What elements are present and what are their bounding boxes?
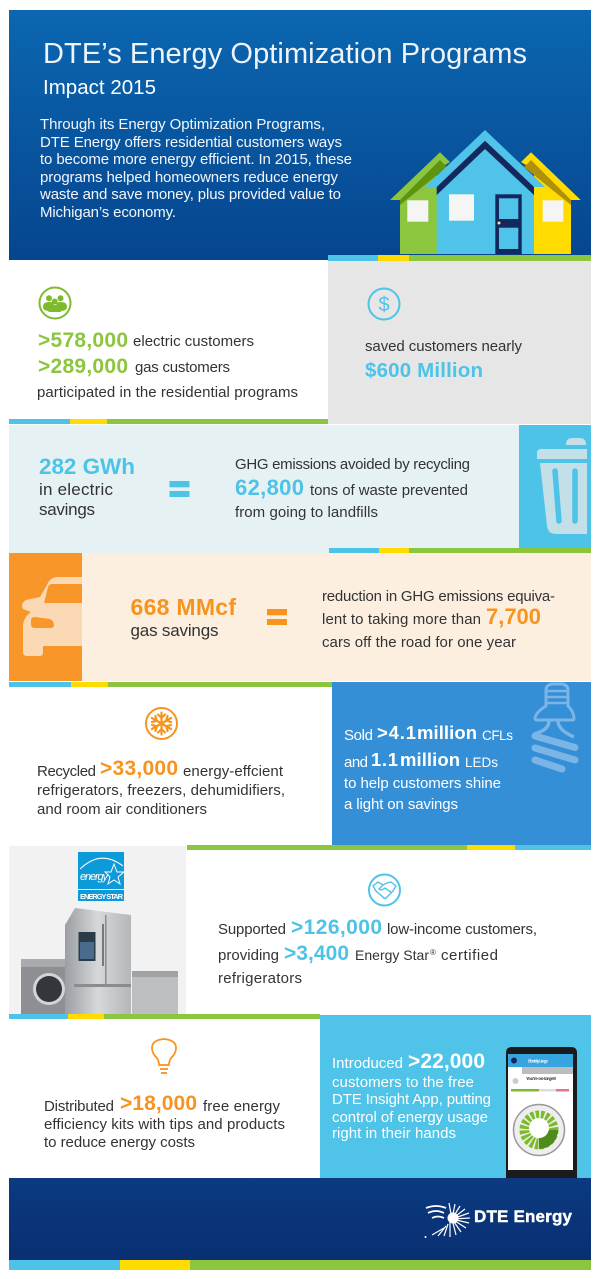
intro paragraph: Michigan’s economy. (40, 204, 176, 221)
CFLs and LEDs text: CFLs (482, 728, 513, 743)
app text: right in their hands (332, 1125, 456, 1142)
logo: DTE Energy: DTE Energy (474, 1207, 573, 1226)
intro paragraph (39, 116, 352, 221)
intro paragraph: programs helped homeowners reduce energy (40, 169, 338, 186)
low-income text: ® (430, 948, 436, 957)
app text: control of energy usage (332, 1109, 488, 1126)
savings label: saved customers nearly (365, 338, 522, 355)
CFLs and LEDs text: LEDs (465, 755, 498, 770)
gas savings figure (130, 594, 236, 640)
panel: Energy Star appliances image (9, 846, 186, 1014)
CFLs and LEDs text: a light on savings (344, 796, 458, 813)
electric customers stat: electric customers (133, 333, 254, 350)
recycled text: refrigerators, freezers, dehumidifiers, (37, 782, 285, 799)
gas customers stat: gas customers (135, 359, 230, 376)
kits text: >18,000 (120, 1092, 197, 1115)
icon: bulb outline (152, 1039, 176, 1073)
Energy Star logo: ENERGY STAR (80, 892, 124, 901)
icon: snowflake (146, 708, 177, 739)
color strip: electric savings (329, 548, 591, 553)
electric savings figure (39, 454, 135, 519)
recycled text (37, 757, 285, 818)
panel: CFLs and LEDs (332, 682, 591, 845)
recycled text: and room air conditioners (37, 801, 207, 818)
icon: people (40, 288, 70, 318)
intro paragraph: DTE Energy offers residential customers ways (40, 134, 342, 151)
CFLs and LEDs text: 1.1 (371, 749, 398, 770)
color strip: gas savings (9, 682, 332, 687)
app text (332, 1050, 491, 1142)
panel: DTE Insight App (320, 1015, 591, 1178)
recycling equivalence text: from going to landfills (235, 504, 378, 521)
cars equivalence text: cars off the road for one year (322, 634, 516, 651)
savings figure: $600 Million (365, 359, 483, 382)
CFLs and LEDs text: to help customers shine (344, 775, 501, 792)
CFLs and LEDs text: Sold (344, 727, 373, 744)
low-income text: certified (441, 947, 498, 964)
color strip: energy kits (9, 1014, 320, 1019)
header panel (9, 10, 591, 260)
recycling equivalence text: GHG emissions avoided by recycling (235, 456, 470, 473)
CFLs and LEDs text: million (417, 722, 477, 743)
refrigerator (65, 908, 131, 1014)
kits text: free energy (203, 1098, 280, 1115)
icon: houses (390, 130, 581, 254)
equals sign (267, 609, 287, 625)
washer (21, 959, 66, 1014)
low-income text: >3,400 (284, 942, 349, 965)
icon: dollar: $ (378, 294, 390, 316)
footer (9, 1178, 591, 1260)
gas savings figure: 668 MMcf (130, 594, 236, 620)
electric customers stat: >578,000 (38, 329, 128, 352)
panel: savings (328, 261, 591, 424)
cars equivalence text: reduction in GHG emissions equiva- (322, 588, 555, 605)
low-income text: providing (218, 947, 279, 964)
kits text: to reduce energy costs (44, 1134, 195, 1151)
logo: DTE Energy (424, 1203, 573, 1238)
color strip: low income (187, 845, 591, 850)
kits text: efficiency kits with tips and products (44, 1116, 285, 1133)
gas customers stat (38, 355, 230, 378)
recycling equivalence text: tons of waste prevented (310, 482, 468, 499)
kits text: Distributed (44, 1098, 114, 1115)
Energy Star logo: energy (80, 871, 110, 883)
icon: light bulb (534, 684, 575, 769)
recycling equivalence text (235, 456, 470, 521)
title: DTE’s Energy Optimization Programs (43, 38, 527, 70)
recycled text: Recycled (37, 763, 96, 780)
cars equivalence text: 7,700 (486, 604, 541, 629)
CFLs and LEDs text: and (344, 754, 368, 771)
electric customers stat (38, 329, 254, 352)
electric savings figure: 282 GWh (39, 454, 135, 479)
recycled text: energy-effcient (183, 763, 284, 780)
panel: car icon (9, 553, 90, 681)
gas savings figure: gas savings (130, 621, 218, 640)
icon: phone with app: You're on-target! (526, 1076, 556, 1081)
icon: phone with app (506, 1047, 577, 1178)
low-income text: refrigerators (218, 970, 302, 987)
icon: phone with app: Electricity Usage (528, 1058, 548, 1064)
cars equivalence text (322, 588, 555, 651)
color strip: top right (328, 255, 591, 261)
recycled text: >33,000 (100, 757, 178, 780)
panel: energy efficiency kits (9, 1019, 320, 1178)
app text: customers to the free (332, 1074, 474, 1091)
electric savings figure: in electric (39, 480, 114, 499)
low-income text: >126,000 (291, 916, 382, 939)
low-income text: Supported (218, 921, 286, 938)
CFLs and LEDs text (344, 722, 513, 813)
gas customers stat: >289,000 (38, 355, 128, 378)
equals sign (170, 481, 190, 497)
intro paragraph: waste and save money, plus provided value to (39, 186, 341, 203)
electric savings figure: savings (39, 500, 95, 519)
panel: customers (9, 261, 328, 419)
panel: gas savings (82, 553, 591, 681)
participation text: participated in the residential programs (37, 384, 298, 401)
color strip: footer (9, 1260, 591, 1270)
icon: handshake (369, 874, 400, 906)
CFLs and LEDs text: >4.1 (377, 722, 416, 743)
low-income text (218, 916, 537, 987)
low-income text: low-income customers, (387, 921, 537, 938)
subtitle: Impact 2015 (43, 76, 156, 99)
app text: Introduced (332, 1055, 403, 1072)
dishwasher (132, 971, 178, 1014)
recycling equivalence text: 62,800 (235, 475, 304, 500)
low-income text: Energy Star (355, 947, 429, 963)
panel: trash icon (519, 425, 591, 548)
intro paragraph: to become more energy efficient. In 2015, these (40, 151, 352, 168)
intro paragraph: Through its Energy Optimization Programs, (40, 116, 325, 133)
cars equivalence text: lent to taking more than (322, 611, 481, 628)
icon: dollar (368, 288, 400, 320)
panel: electric savings (9, 425, 591, 553)
Energy Star logo (78, 852, 124, 901)
kits text (44, 1092, 285, 1151)
color strip: customers (9, 419, 328, 424)
panel: low-income customers (186, 850, 591, 1014)
CFLs and LEDs text: million (400, 749, 460, 770)
app text: >22,000 (408, 1050, 485, 1073)
panel: recycled appliances (9, 687, 332, 845)
app text: DTE Insight App, putting (332, 1091, 491, 1108)
